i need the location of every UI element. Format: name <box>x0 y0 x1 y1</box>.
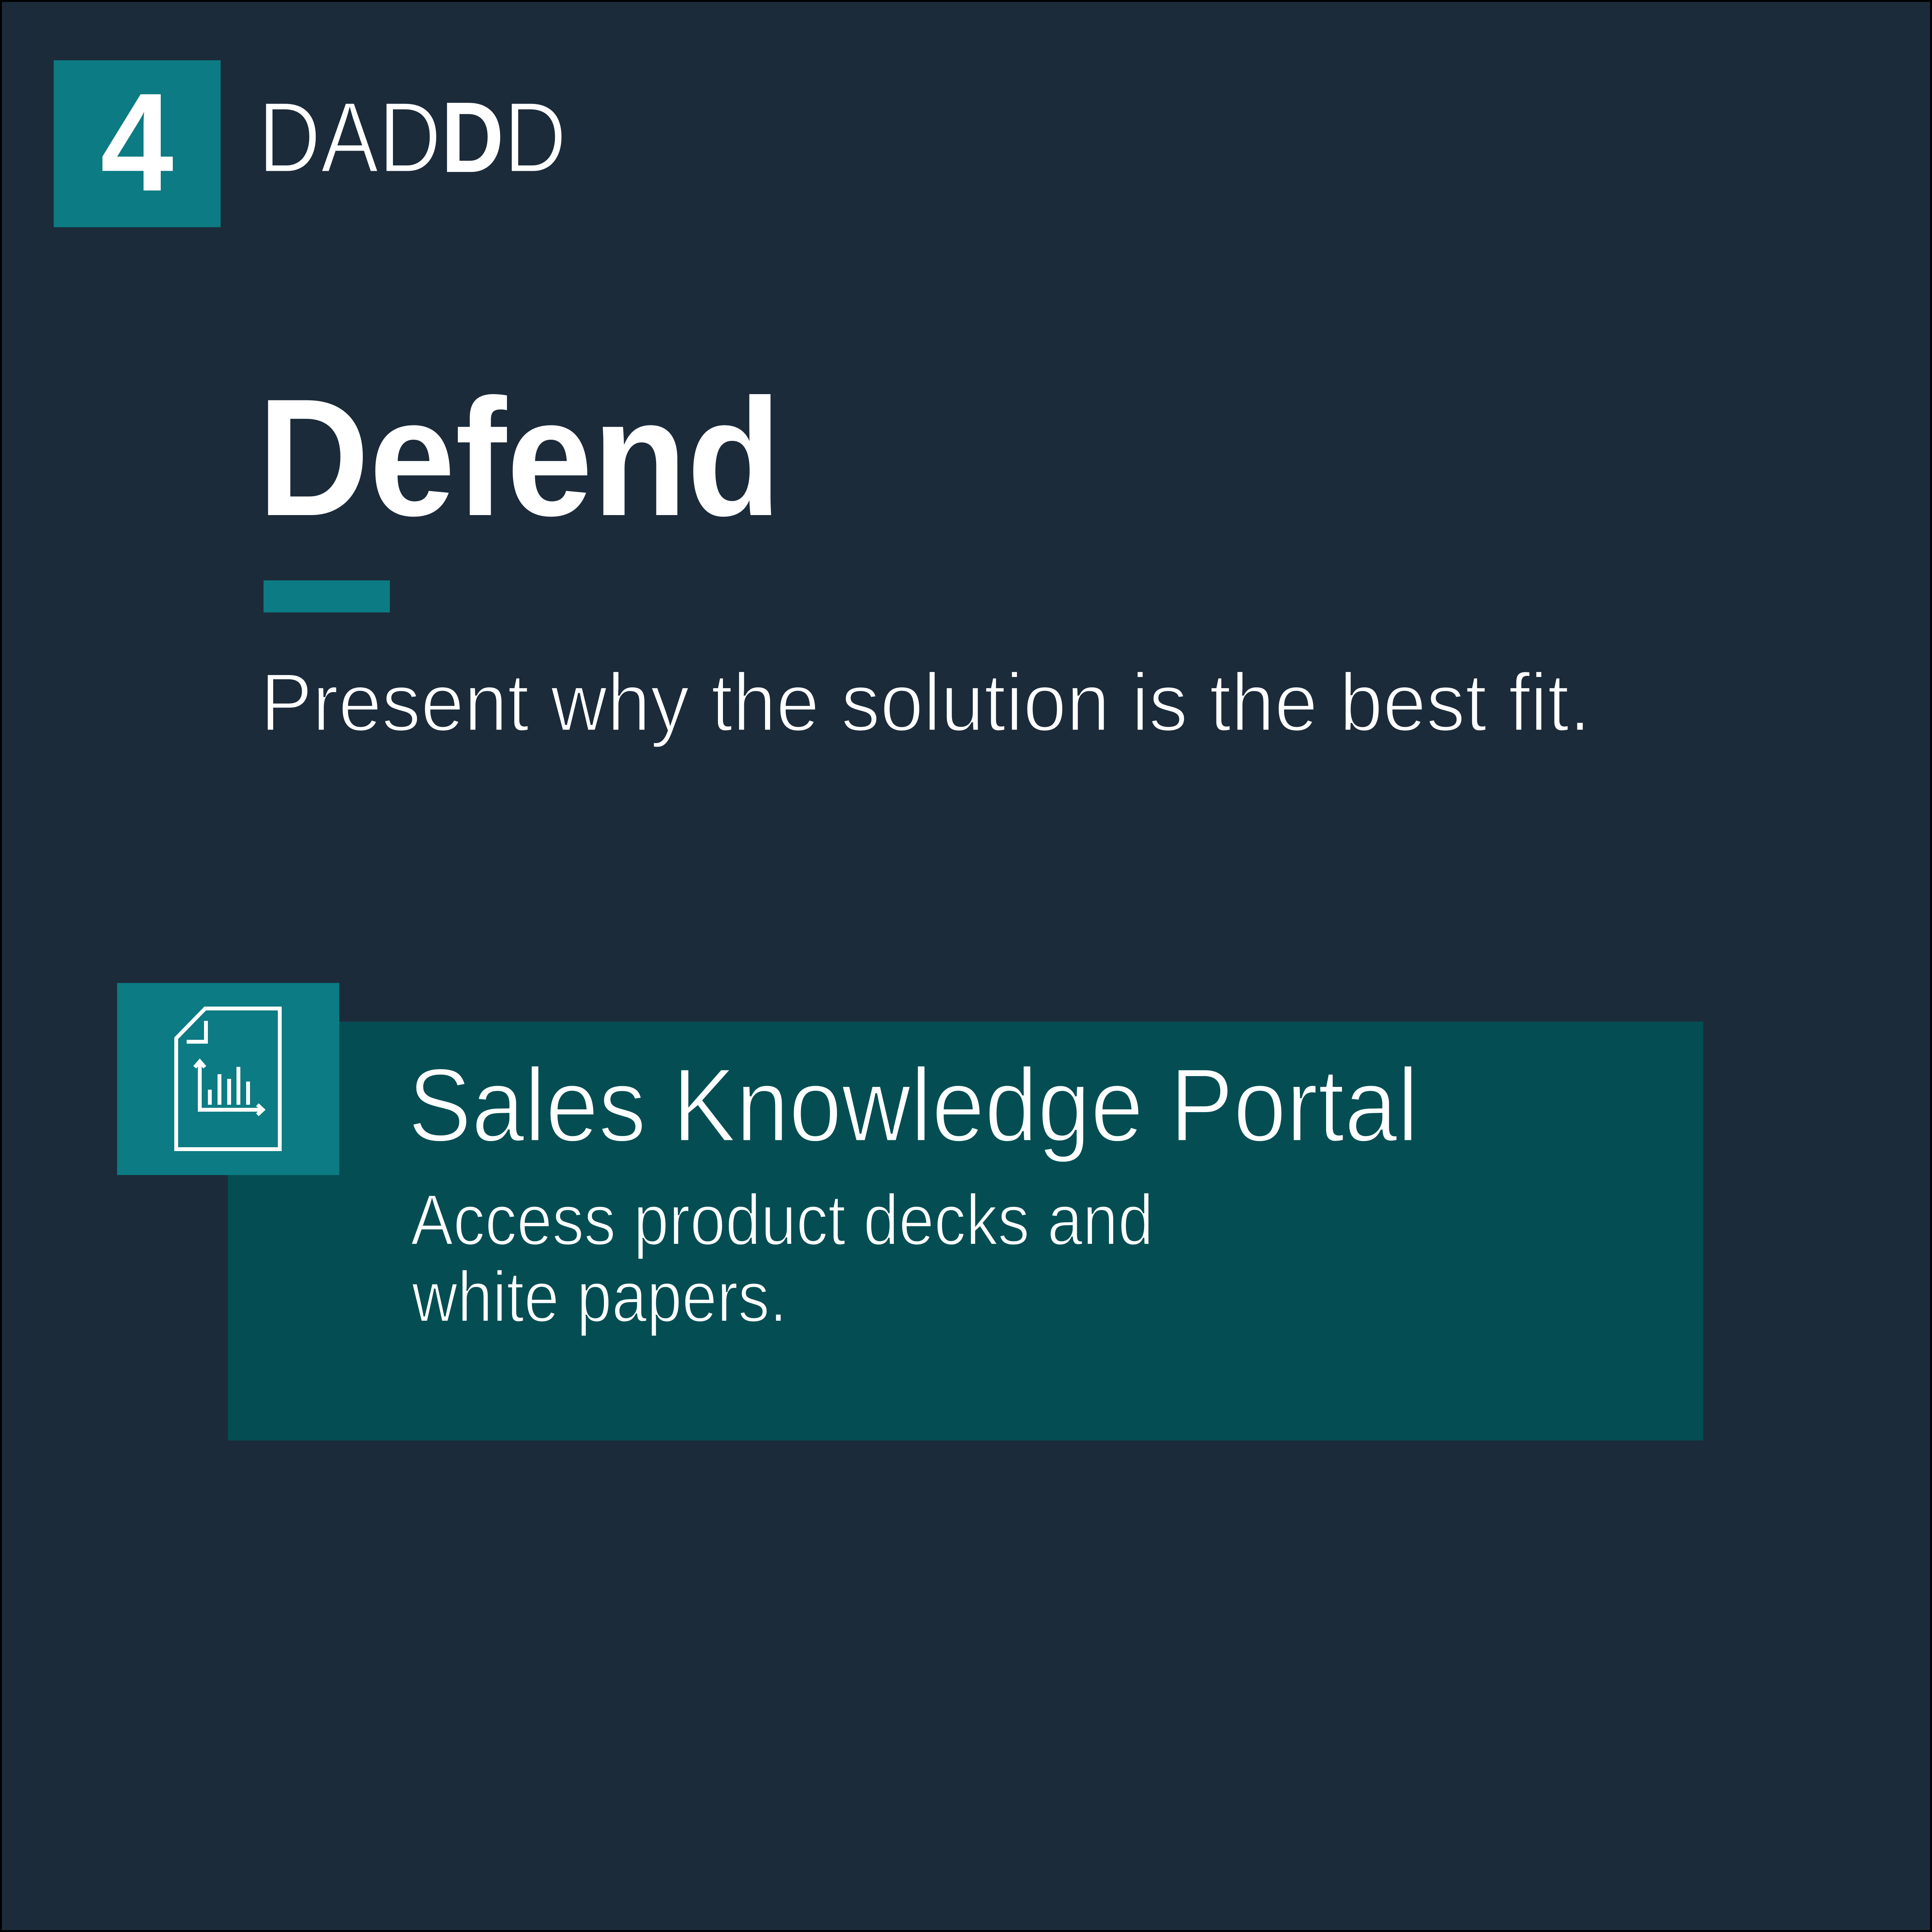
panel: sales knowledge portal <box>228 1022 1703 1440</box>
icon: document with bar chart <box>176 1009 280 1149</box>
icon tile <box>117 983 339 1175</box>
title: Defend <box>258 364 781 551</box>
panel description: Access product decks and <box>411 1180 1153 1260</box>
step number badge <box>54 60 221 227</box>
step number badge: 4 <box>100 64 174 220</box>
panel heading: Sales Knowledge Portal <box>408 1047 1418 1164</box>
subtitle: Present why the solution is the best fit. <box>260 656 1591 748</box>
panel description: white papers. <box>412 1257 787 1337</box>
title accent bar <box>264 580 390 612</box>
acronym label: DADDD <box>258 82 566 194</box>
